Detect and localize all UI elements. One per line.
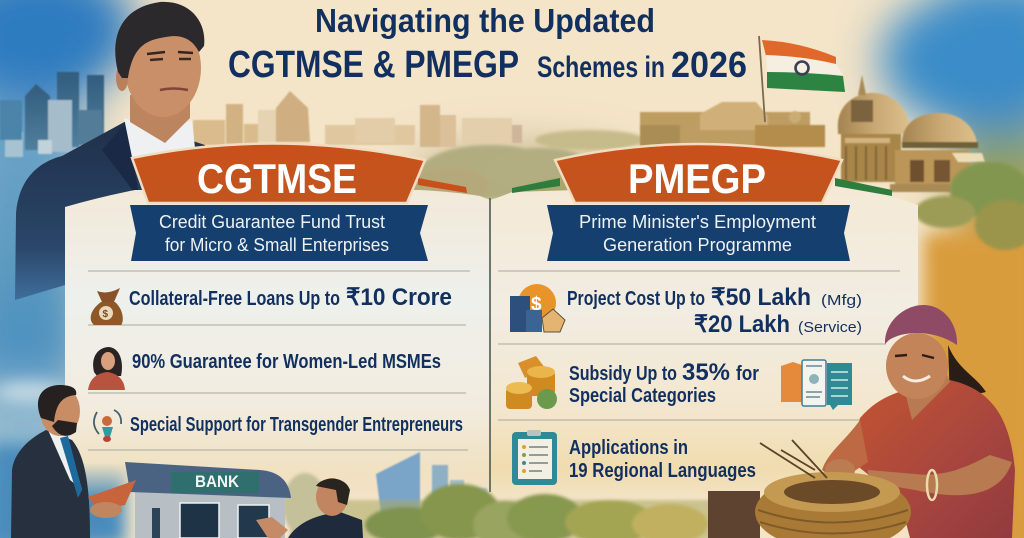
text: applications bbox=[569, 437, 756, 482]
bottom trees bbox=[283, 473, 730, 538]
text: project cost: (Service) bbox=[798, 319, 862, 336]
ear bbox=[116, 65, 128, 91]
text: subsidy: 35% bbox=[682, 359, 730, 386]
face bbox=[886, 333, 948, 399]
text: project cost: Project Cost Up to bbox=[567, 288, 705, 310]
green tail left bbox=[512, 178, 560, 193]
scheme full name: Credit Guarantee Fund Trust bbox=[159, 212, 385, 232]
hand bbox=[90, 502, 122, 518]
tie bbox=[60, 436, 82, 498]
text: women guarantee: 90% Guarantee for Women-Led MSMEs bbox=[132, 351, 441, 373]
pmegp header banner bbox=[512, 144, 892, 261]
icon: documents bbox=[781, 360, 852, 410]
green tree line behind panels bbox=[410, 130, 645, 211]
saree body bbox=[850, 380, 1015, 538]
mouth bbox=[160, 88, 188, 90]
blue ribbon bbox=[547, 205, 850, 261]
text: collateral free loans: ₹10 Crore bbox=[346, 284, 452, 311]
center divider bbox=[489, 198, 491, 492]
headscarf bbox=[885, 305, 957, 345]
client man talking bbox=[256, 478, 363, 538]
text: applications: Applications in bbox=[569, 437, 688, 459]
icon: project buildings bbox=[510, 284, 565, 332]
pmegp header banner: Generation Programme bbox=[603, 235, 792, 255]
icon: coin stacks bbox=[506, 356, 557, 409]
stacked bricks bbox=[708, 491, 760, 538]
right arm bbox=[868, 455, 1012, 495]
head bbox=[40, 386, 80, 436]
orange banner bbox=[555, 144, 842, 203]
banker man standing bbox=[11, 385, 136, 538]
text: subsidy: Subsidy Up to bbox=[569, 363, 677, 385]
walls bbox=[135, 490, 285, 538]
shirt bbox=[48, 430, 82, 490]
icon: transgender support bbox=[94, 410, 121, 442]
scheme name: PMEGP bbox=[628, 155, 766, 202]
title: Schemes in bbox=[537, 51, 665, 84]
icon: woman bbox=[88, 347, 125, 390]
text: subsidy: Special Categories bbox=[569, 385, 716, 407]
text: transgender support: Special Support for Transgender Entrepreneurs bbox=[130, 414, 463, 436]
text: project cost: ₹50 Lakh bbox=[711, 284, 811, 311]
text: project cost: ₹20 Lakh bbox=[694, 311, 790, 338]
hand bbox=[256, 517, 288, 538]
left blue city skyline bbox=[0, 72, 104, 157]
title: Navigating the Updated bbox=[315, 2, 655, 39]
hair bbox=[115, 2, 204, 78]
head bbox=[316, 478, 348, 516]
bamboo sticks bbox=[760, 440, 827, 478]
bank building bbox=[125, 462, 291, 538]
palace and domes bbox=[640, 75, 985, 192]
text: subsidy: for bbox=[736, 363, 759, 385]
suit jacket bbox=[15, 120, 205, 300]
panel: main white board left bbox=[65, 190, 490, 500]
text: project cost bbox=[567, 284, 862, 338]
right side foliage bbox=[915, 162, 1024, 250]
text: collateral free loans: Collateral-Free Loans Up to bbox=[129, 288, 340, 310]
orange tail bbox=[418, 178, 467, 193]
hair bbox=[316, 479, 350, 505]
suit bbox=[11, 430, 90, 538]
cgtmse header banner bbox=[130, 143, 467, 261]
icon: money bag bbox=[91, 288, 123, 325]
hand bbox=[825, 459, 855, 481]
left arm bbox=[822, 420, 868, 482]
tablet bbox=[88, 480, 136, 510]
text: subsidy bbox=[569, 359, 759, 407]
title: CGTMSE & PMEGP bbox=[228, 44, 519, 86]
tan city skyline bbox=[193, 91, 522, 147]
woven basket bbox=[755, 440, 911, 538]
text: project cost: (Mfg) bbox=[821, 292, 862, 309]
neck bbox=[130, 95, 190, 143]
scheme name: CGTMSE bbox=[197, 155, 357, 202]
green tail right bbox=[835, 178, 892, 196]
shirt collar bbox=[124, 118, 195, 162]
green band bbox=[767, 72, 845, 92]
bank sign bbox=[171, 472, 259, 493]
neck bbox=[904, 370, 950, 420]
hair back bbox=[948, 345, 986, 400]
chakra bbox=[796, 62, 808, 74]
title bbox=[228, 2, 747, 86]
saffron band bbox=[762, 40, 836, 65]
icon: project buildings: $ bbox=[531, 294, 542, 315]
text: collateral free loans bbox=[129, 284, 452, 311]
row divider lines bbox=[88, 271, 900, 450]
title: 2026 bbox=[671, 44, 747, 85]
bangle bbox=[927, 470, 937, 500]
roof bbox=[125, 462, 291, 498]
cgtmse header banner: for Micro & Small Enterprises bbox=[165, 235, 389, 255]
scheme full name: Prime Minister's Employment bbox=[579, 212, 816, 232]
white band bbox=[766, 55, 843, 75]
bank building: BANK bbox=[195, 472, 240, 491]
panel: main white board right bbox=[490, 182, 918, 500]
suit bbox=[288, 512, 363, 538]
icon: money bag: $ bbox=[102, 309, 108, 320]
text: applications: 19 Regional Languages bbox=[569, 460, 756, 482]
hair and beard bbox=[38, 385, 77, 436]
eyebrows and eyes bbox=[147, 52, 193, 54]
smile bbox=[903, 376, 930, 381]
icon: clipboard bbox=[512, 430, 557, 485]
indian flag bbox=[759, 36, 845, 122]
presenter man in suit bbox=[15, 2, 205, 300]
windows bbox=[180, 503, 219, 538]
face bbox=[125, 19, 201, 117]
artisan woman bbox=[822, 305, 1015, 538]
flag pole bbox=[759, 36, 765, 122]
blue ribbon bbox=[130, 205, 428, 261]
eyes bbox=[895, 355, 934, 358]
lapel bbox=[102, 120, 140, 200]
orange banner bbox=[132, 143, 425, 203]
background blue buildings bottom bbox=[376, 452, 487, 523]
